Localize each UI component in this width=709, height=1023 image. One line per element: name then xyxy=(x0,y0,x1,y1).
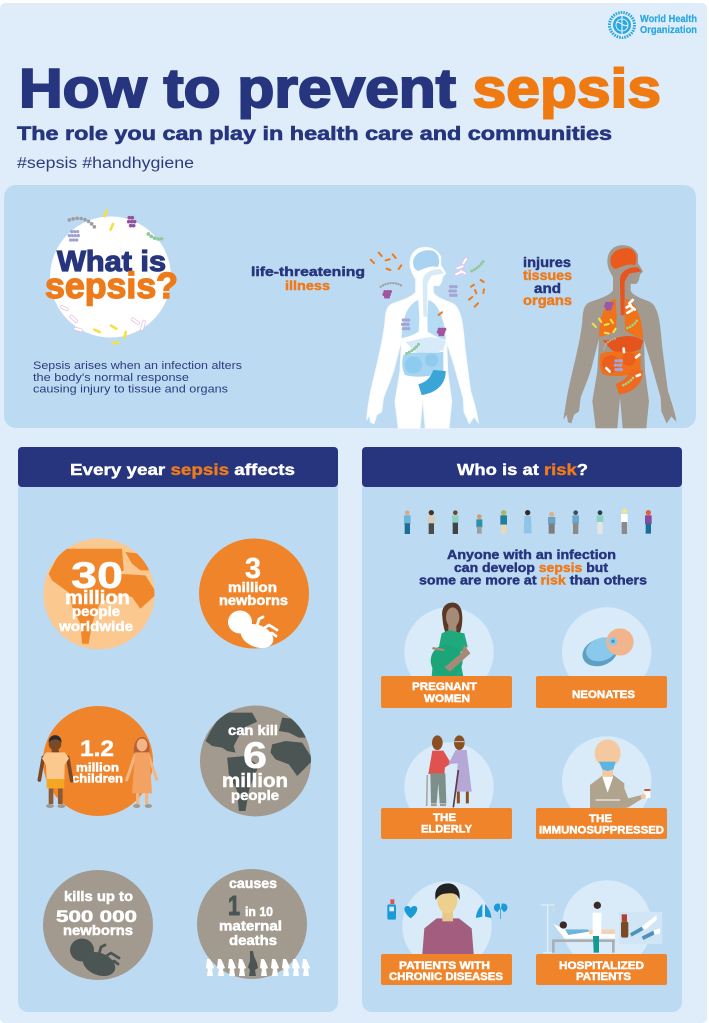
icon: elderly couple xyxy=(427,735,472,807)
label: WOMEN xyxy=(424,693,470,705)
healthy body illustration xyxy=(367,247,484,428)
label: life-threatening illness xyxy=(251,265,365,293)
risk statement: some are more at risk than others xyxy=(419,572,647,588)
stat: can kill 6 million people: million xyxy=(222,771,288,792)
stat: kills up to 500 000 newborns: kills up to xyxy=(64,889,133,904)
label: ELDERLY xyxy=(421,824,473,836)
logo: World Health Organization: Organization xyxy=(640,24,697,36)
stat: can kill 6 million people xyxy=(200,706,314,816)
stat: 30 million people worldwide: worldwide xyxy=(58,619,134,634)
label xyxy=(381,954,512,985)
label: HOSPITALIZED xyxy=(559,960,644,972)
stat: causes 1 in 10 maternal deaths: causes xyxy=(229,876,277,891)
group: patients with chronic diseases xyxy=(381,881,512,985)
icon: fetus xyxy=(228,610,277,653)
row of people xyxy=(404,509,652,534)
label: injures tissues and organs: and xyxy=(534,281,561,296)
icon: man with chronic disease symbols xyxy=(387,883,507,954)
stat: 30 million people worldwide: people xyxy=(72,604,121,619)
panel heading: Every year sepsis affects xyxy=(70,462,295,479)
label: NEONATES xyxy=(572,689,635,701)
panel heading xyxy=(362,447,682,487)
stat: 1.2 million children: million xyxy=(76,760,119,774)
risk statement: can develop sepsis but xyxy=(454,560,609,575)
stat: can kill 6 million people: can kill xyxy=(228,723,278,738)
sepsis description: Sepsis arises when an infection alters xyxy=(33,360,243,372)
group: pregnant women xyxy=(381,603,512,708)
stat: 3 million newborns xyxy=(199,538,309,653)
stat: 1.2 million children xyxy=(39,706,157,816)
what is sepsis heading xyxy=(45,246,178,306)
title: How to prevent sepsis xyxy=(19,57,661,119)
stat: causes 1 in 10 maternal deaths: deaths xyxy=(229,933,277,948)
icon: pregnant woman xyxy=(431,603,470,677)
label xyxy=(381,676,512,708)
what is sepsis heading: What is xyxy=(57,246,166,278)
icon: row of pregnant women xyxy=(206,951,310,976)
stat: 30 million people worldwide xyxy=(44,538,157,650)
stat: causes 1 in 10 maternal deaths xyxy=(197,869,310,979)
label: injures tissues and organs: organs xyxy=(523,293,572,308)
group: the elderly xyxy=(381,735,512,839)
stat: can kill 6 million people: 6 xyxy=(243,735,267,776)
stat: kills up to 500 000 newborns xyxy=(43,870,153,981)
stat: 3 million newborns: newborns xyxy=(219,593,288,608)
group: hospitalized patients xyxy=(536,880,667,985)
icon: boy and girl xyxy=(39,735,157,808)
sepsis description: causing injury to tissue and organs xyxy=(33,384,229,396)
stat: kills up to 500 000 newborns: newborns xyxy=(63,923,133,938)
label: THE xyxy=(589,813,612,825)
panel heading xyxy=(18,447,338,487)
logo: World Health Organization: World Health xyxy=(640,13,697,25)
label: CHRONIC DISEASES xyxy=(389,971,503,983)
stat: 3 million newborns: million xyxy=(228,580,277,595)
panel: every year sepsis affects xyxy=(18,447,338,1012)
label xyxy=(381,808,512,839)
label xyxy=(536,954,667,985)
icon: swaddled baby xyxy=(579,628,634,671)
logo: World Health Organization xyxy=(610,12,697,38)
stat: 30 million people worldwide: million xyxy=(65,588,130,609)
panel heading: Who is at risk ? xyxy=(457,462,588,479)
label: PATIENTS xyxy=(576,971,631,983)
label: THE xyxy=(433,812,456,824)
infected body illustration xyxy=(563,245,677,428)
label: life-threatening illness: illness xyxy=(285,279,330,293)
label: PREGNANT xyxy=(412,681,477,693)
sepsis description xyxy=(33,360,243,396)
risk statement: Anyone with an infection xyxy=(447,547,616,562)
white circle with microbes xyxy=(50,210,171,343)
stat: causes 1 in 10 maternal deaths: in 10 xyxy=(245,905,273,919)
stat: kills up to 500 000 newborns: 500 000 xyxy=(56,908,137,926)
label: injures tissues and organs: tissues xyxy=(523,268,572,283)
stat: causes 1 in 10 maternal deaths: 1 xyxy=(228,890,240,921)
stat: 1.2 million children: 1.2 xyxy=(80,736,114,761)
risk statement xyxy=(419,547,647,588)
label: IMMUNOSUPPRESSED xyxy=(539,824,664,836)
stat: causes 1 in 10 maternal deaths: maternal xyxy=(219,918,282,934)
hashtags: #sepsis #handhygiene xyxy=(17,155,194,172)
label: life-threatening illness: life-threatening xyxy=(251,265,365,279)
stat: 30 million people worldwide: 30 xyxy=(71,555,123,596)
group: the immunosuppressed xyxy=(536,736,667,839)
panel: what is sepsis xyxy=(4,185,696,428)
what is sepsis heading: sepsis? xyxy=(45,265,178,306)
stat: 1.2 million children: children xyxy=(72,772,123,786)
icon: patient in hospital bed with doctor xyxy=(541,902,662,953)
sepsis description: the body's normal response xyxy=(33,372,189,384)
subtitle: The role you can play in health care and communities xyxy=(17,124,612,145)
icon: person with mask xyxy=(590,739,650,808)
stat: can kill 6 million people: people xyxy=(231,788,280,803)
label: injures tissues and organs: injures xyxy=(523,255,571,270)
label: PATIENTS WITH xyxy=(399,960,490,972)
group: neonates xyxy=(536,607,667,708)
label xyxy=(536,808,667,839)
label: injures tissues and organs xyxy=(523,255,572,308)
icon: dark fetus xyxy=(70,938,119,981)
stat: 3 million newborns: 3 xyxy=(245,553,261,585)
panel: who is at risk xyxy=(362,447,682,1012)
